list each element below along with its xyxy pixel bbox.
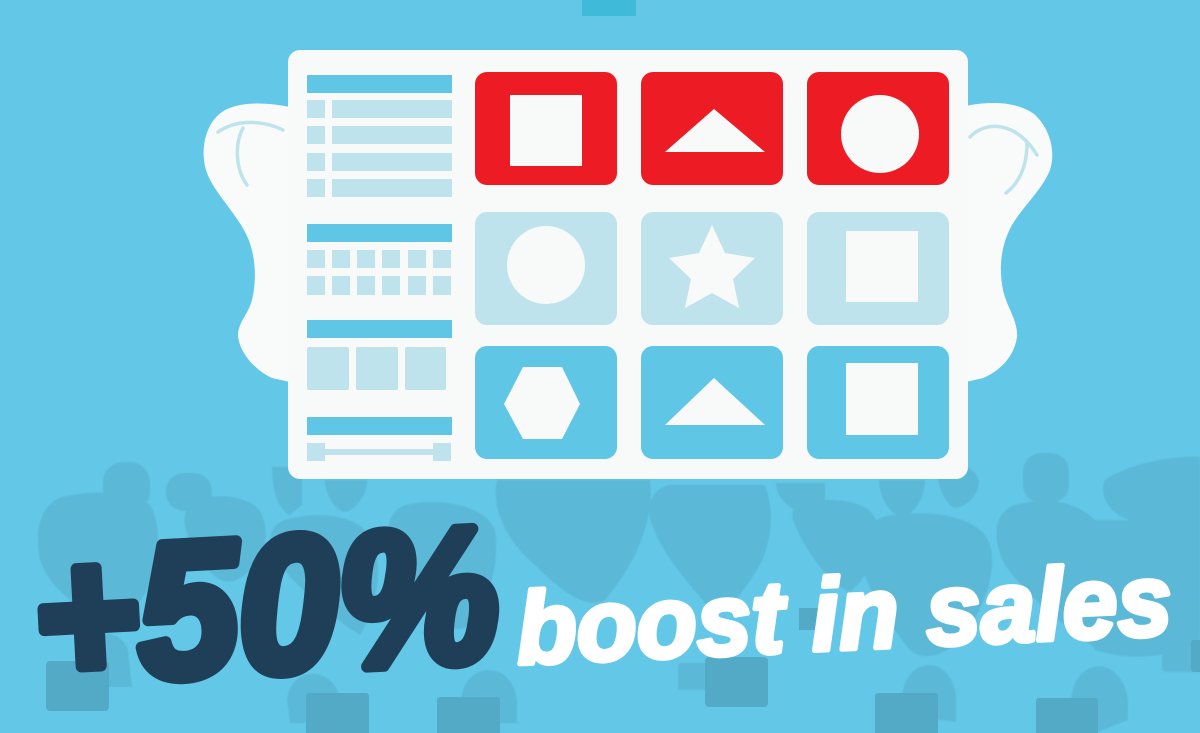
crowd silhouettes bbox=[38, 453, 1200, 733]
tile: blue square bbox=[807, 346, 949, 459]
crowd laptops bbox=[46, 608, 1200, 733]
tile: pale square bbox=[807, 212, 949, 325]
sidebar: swatch filter bbox=[307, 224, 452, 295]
top edge tab bbox=[582, 0, 636, 16]
tile: blue hexagon bbox=[475, 346, 617, 459]
tile: red circle bbox=[807, 72, 949, 185]
hands holding the screen bbox=[204, 103, 1052, 382]
tile: pale star bbox=[641, 212, 783, 325]
tile: pale circle bbox=[475, 212, 617, 325]
tile: blue triangle bbox=[641, 346, 783, 459]
right hand bbox=[966, 103, 1052, 382]
tile: red square bbox=[475, 72, 617, 185]
screen panel bbox=[288, 50, 968, 479]
headline text: boost in sales: boost in sales bbox=[514, 542, 1174, 686]
sidebar: thumbnail filter bbox=[307, 320, 452, 390]
left hand bbox=[204, 103, 290, 382]
tile: red triangle bbox=[641, 72, 783, 185]
sidebar: range slider bbox=[307, 417, 452, 461]
headline figure: +50%: +50% bbox=[27, 486, 504, 725]
sidebar: list filter bbox=[307, 75, 452, 197]
